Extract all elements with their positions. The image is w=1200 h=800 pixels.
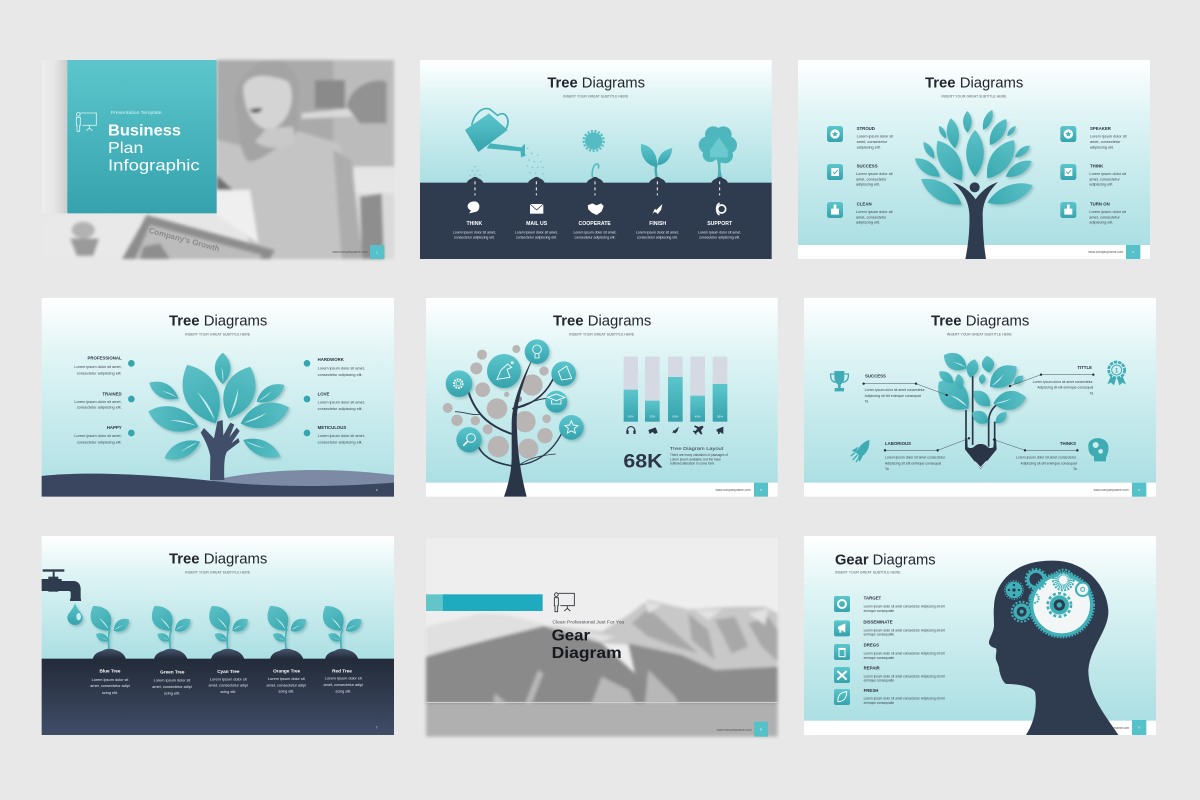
big stat: 68K xyxy=(623,452,663,473)
label: meticulous: consectetur adipiscing elit. xyxy=(318,440,363,444)
callout: laborious: Adipiscing sit elit enimque consequat xyxy=(885,461,941,465)
title: Gear Diagrams xyxy=(835,552,936,568)
list item: repair: Lorem Ipsum dolor sit amet consectetur. Adipiscing sit elit xyxy=(864,674,945,678)
text: success xyxy=(856,163,894,187)
list item: dregs: DREGS xyxy=(864,643,879,648)
hand-shaped trunk xyxy=(201,420,240,480)
section tagline: Clean Professional Just For You xyxy=(552,619,625,624)
step 2: mail us: MAIL US xyxy=(526,221,548,227)
title: Tree Diagrams xyxy=(931,314,1029,330)
label: hardwork: HARDWORK xyxy=(318,357,345,362)
label: trained: consectetur adipiscing elit. xyxy=(77,406,122,410)
icon: graduation cap xyxy=(548,394,565,404)
text: turn on: amet, consectetur xyxy=(1089,215,1120,219)
tree trunk and branches xyxy=(455,362,562,497)
connecting gear xyxy=(1029,594,1039,603)
slide background xyxy=(420,60,772,183)
photo tablet caption: Company's Growth xyxy=(148,226,221,253)
icon: star badge xyxy=(827,126,843,142)
step 4: finish: consectetur adipiscing elit. xyxy=(637,235,678,239)
slide 6: pencil tree xyxy=(804,298,1156,497)
slide background xyxy=(798,60,1150,245)
footer website and page number xyxy=(333,245,384,259)
text: turn on: TURN ON xyxy=(1090,201,1110,206)
section heading: Diagram xyxy=(552,645,622,662)
rolling hills xyxy=(42,470,394,497)
callout: success xyxy=(862,373,948,404)
text: green tree: amet, consectetur adipi xyxy=(152,685,192,689)
pencil tree leaves xyxy=(930,348,1028,428)
text: stroud: STROUD xyxy=(857,126,875,131)
sapling 1 xyxy=(85,601,132,649)
label: love: Lorem ipsum dolor sit amet, xyxy=(318,401,365,405)
text: red tree xyxy=(324,668,363,693)
text: orange tree: scing elit. xyxy=(278,690,294,694)
subtitle: INSERT YOUR GREAT SUBTITLE HERE xyxy=(947,332,1013,336)
text: think: adipiscing elit. xyxy=(1089,183,1113,187)
slide background xyxy=(804,298,1156,483)
footer website and page number xyxy=(717,722,768,737)
sapling 4 xyxy=(262,601,309,649)
footer website and page number: 1 xyxy=(376,250,378,254)
text: turn on: Lorem ipsum dolor sit xyxy=(1089,210,1127,214)
bar 2: 32% xyxy=(649,414,656,418)
step 1: think: consectetur adipiscing elit. xyxy=(454,235,495,239)
text: turn on: adipiscing elit. xyxy=(1089,221,1113,225)
tree leaves xyxy=(145,353,293,465)
list item: fresh: Lorem Ipsum dolor sit amet consectetur. Adipiscing sit elit xyxy=(864,697,945,701)
footer website and page number xyxy=(1094,483,1146,497)
upper ring gear xyxy=(1026,569,1046,590)
text: blue tree: scing elit. xyxy=(102,691,118,695)
text: stroud: adipiscing elit. xyxy=(857,145,881,149)
icon: headphones xyxy=(627,427,635,431)
text: blue tree: Lorem Ipsum dolor sit xyxy=(92,678,129,682)
bar chart xyxy=(624,357,727,422)
navy ground panel xyxy=(42,659,394,735)
step 3: cooperate xyxy=(573,203,617,239)
illustration: sun and sprout xyxy=(584,131,604,177)
label: happy: Lorem ipsum dolor sit amet, xyxy=(74,434,122,438)
text: cyan tree: Lorem Ipsum dolor sit xyxy=(210,677,248,681)
text: cyan tree xyxy=(209,669,248,694)
icon: award badge xyxy=(1107,362,1126,385)
white footer band xyxy=(804,483,1156,497)
icon: presenter xyxy=(554,593,574,612)
text: speaker: adipiscing elit. xyxy=(1090,145,1114,149)
subtitle: INSERT YOUR GREAT SUBTITLE HERE xyxy=(185,570,251,574)
text: clean: adipiscing elit. xyxy=(856,221,880,225)
footer website and page number xyxy=(1088,245,1140,259)
step 3: cooperate: COOPERATE xyxy=(579,221,611,227)
illustration: watering can xyxy=(465,109,544,176)
text: stroud: amet, consectetur xyxy=(857,140,888,144)
sapling 2 xyxy=(146,601,194,649)
top gear xyxy=(1053,570,1074,590)
stat description: suffered alteration in some form. xyxy=(670,462,715,466)
pencil stem xyxy=(965,370,998,469)
list item: target: Lorem Ipsum dolor sit amet consectetur. Adipiscing sit elit xyxy=(864,605,945,609)
text: think: THINK xyxy=(1090,163,1104,168)
label: professional: Lorem ipsum dolor sit amet, xyxy=(74,365,122,369)
text: red tree: Red Tree xyxy=(332,668,352,673)
footer website and page number: 6 xyxy=(1138,488,1140,492)
slide 4: hand tree xyxy=(42,298,394,497)
text: clean: Lorem ipsum dolor sit xyxy=(856,210,894,214)
right feature list xyxy=(1060,126,1128,225)
step 3: cooperate: consectetur adipiscing elit. xyxy=(575,235,615,239)
footer website and page number xyxy=(716,483,768,497)
callout: success: Lorem ipsum dolor sit amet consectetur. xyxy=(865,388,925,392)
text: speaker xyxy=(1090,126,1128,149)
text: green tree xyxy=(152,670,192,696)
page number: 4 xyxy=(376,488,378,492)
lower left gear xyxy=(1012,602,1032,622)
icon: light bulb xyxy=(533,345,541,358)
footer website and page number: www.companyname.com xyxy=(333,250,368,254)
text: stroud: Lorem ipsum dolor sit xyxy=(857,135,894,139)
step 5: support: SUPPORT xyxy=(707,221,733,227)
step 4: finish: Lorem ipsum dolor sit amet, xyxy=(636,230,679,234)
step 2: mail us: consectetur adipiscing elit. xyxy=(516,235,557,239)
title: Tree Diagrams xyxy=(169,314,267,330)
left feature list xyxy=(827,126,894,225)
list item: disseminate: DISSEMINATE xyxy=(863,620,893,625)
text: blue tree: amet, consectetur adipi xyxy=(90,684,130,688)
label: love xyxy=(304,392,365,411)
callout: thinks: THINKS xyxy=(1060,441,1076,446)
label: hardwork: Lorem ipsum dolor sit amet, xyxy=(318,366,365,370)
callout: success: Adipiscing sit elit enimque consequat xyxy=(865,394,921,398)
illustration: grown tree xyxy=(699,126,737,177)
soil mounds xyxy=(93,649,358,659)
text: speaker: SPEAKER xyxy=(1090,126,1112,131)
label: trained: TRAINED xyxy=(102,392,122,397)
panel heading: Business xyxy=(108,122,181,139)
footer website and page number: www.companyname.com xyxy=(1094,488,1129,492)
icon: rocket xyxy=(851,440,869,462)
icon: handshake xyxy=(588,203,604,215)
white footer band xyxy=(804,721,1156,735)
text: speaker: amet, consectetur xyxy=(1090,140,1121,144)
callout: success: SUCCESS xyxy=(865,373,886,378)
icon: clipboard xyxy=(827,164,843,180)
slide 9: gear diagrams head xyxy=(804,536,1156,735)
bar 3: 69% xyxy=(672,414,679,418)
text: turn on xyxy=(1089,201,1127,225)
callout: laborious: Lorem ipsum dolor sit amet consectetur. xyxy=(885,456,946,460)
slide background xyxy=(426,298,778,483)
footer website and page number: 5 xyxy=(760,488,762,492)
bar 1: 50% xyxy=(628,414,634,418)
label: love: consectetur adipiscing elit. xyxy=(318,407,363,411)
slide background xyxy=(42,298,394,497)
text: think: amet, consectetur xyxy=(1089,177,1120,181)
text: think: Lorem ipsum dolor sit xyxy=(1089,172,1127,176)
step 2: mail us xyxy=(515,204,558,239)
label: trained: Lorem ipsum dolor sit amet, xyxy=(74,400,122,404)
tree leaves xyxy=(912,108,1036,212)
icon: megaphone xyxy=(717,427,723,434)
icon: water drop xyxy=(67,603,83,625)
stat description xyxy=(670,446,728,466)
text: blue tree xyxy=(90,669,130,695)
callout: thinks: Ta xyxy=(1073,467,1077,471)
large toothed ring xyxy=(1029,573,1094,637)
right small gear xyxy=(1076,583,1089,596)
list item: fresh xyxy=(834,688,945,705)
icon: phone support xyxy=(717,203,726,215)
text: success: Lorem ipsum dolor sit xyxy=(856,172,894,176)
title: Tree Diagrams xyxy=(547,76,645,92)
text: red tree: scing elit. xyxy=(335,689,351,693)
illustration: seedling xyxy=(641,144,672,177)
step 1: think: THINK xyxy=(466,221,482,227)
slide 5: tree with bar chart xyxy=(426,298,778,497)
step 4: finish: FINISH xyxy=(649,221,666,227)
section heading: Gear xyxy=(552,628,590,645)
text: orange tree xyxy=(267,669,306,694)
text: cyan tree: Cyan Tree xyxy=(217,669,240,674)
icon: star outline xyxy=(565,421,578,433)
label: trained xyxy=(74,392,135,410)
list item: disseminate: enimque consequatte xyxy=(864,633,894,637)
teal title panel xyxy=(67,60,217,213)
callout: title: Lorem ipsum dolor sit amet consectetur. xyxy=(1033,380,1093,384)
icon: headphone cups xyxy=(626,430,636,434)
list item: target: TARGET xyxy=(864,596,881,601)
text: cyan tree: amet, consectetur adipi xyxy=(209,683,248,687)
callout: laborious: LABORIOUS xyxy=(885,441,911,446)
text: orange tree: Lorem Ipsum dolor sit xyxy=(268,677,306,681)
icon: gear xyxy=(454,379,463,388)
bar icons xyxy=(626,425,723,435)
gears inside head xyxy=(1005,569,1094,637)
step 4: finish xyxy=(636,204,679,239)
icon: cleaning brush xyxy=(1060,202,1076,218)
list item: target xyxy=(834,596,945,613)
slide 3: person tree xyxy=(798,60,1150,259)
list item: fresh: FRESH xyxy=(864,688,878,693)
text: stroud xyxy=(857,126,894,149)
list item: repair xyxy=(834,666,945,683)
soil mounds with dashed connectors xyxy=(467,177,728,195)
bar 5: 58% xyxy=(717,414,723,418)
step 1: think xyxy=(453,201,496,239)
slide 2: tree growth stages xyxy=(420,60,772,259)
step 3: cooperate: Lorem ipsum dolor sit amet, xyxy=(573,230,617,234)
icon: magnifier xyxy=(463,434,475,446)
text: clean: CLEAN xyxy=(857,201,872,206)
callout: title xyxy=(1009,365,1094,395)
icon: trophy xyxy=(831,371,848,391)
icon: megaphone xyxy=(558,366,572,380)
person-shaped trunk xyxy=(953,182,998,259)
text: orange tree: Orange Tree xyxy=(273,669,301,674)
text: green tree: Green Tree xyxy=(160,670,185,675)
subtitle: INSERT YOUR GREAT SUBTITLE HERE xyxy=(569,332,635,336)
list item: disseminate xyxy=(834,620,945,637)
label: love: LOVE xyxy=(318,392,330,397)
label: meticulous: METICULOUS xyxy=(318,425,346,430)
callout: laborious xyxy=(884,437,970,471)
icon: flask xyxy=(497,362,513,379)
label: hardwork xyxy=(304,357,365,377)
title: Tree Diagrams xyxy=(553,314,651,330)
navy ground panel xyxy=(420,183,772,259)
step 5: support: consectetur adipiscing elit. xyxy=(699,235,740,239)
text: success: amet, consectetur xyxy=(856,177,887,181)
subtitle: INSERT YOUR GREAT SUBTITLE HERE xyxy=(941,95,1007,99)
icon: envelope xyxy=(530,204,543,214)
list item: dregs: enimque consequatte xyxy=(864,656,894,660)
icon: presenter xyxy=(76,112,96,131)
text: blue tree: Blue Tree xyxy=(100,669,121,674)
footer website and page number: 9 xyxy=(1138,726,1140,730)
stat description: There are many variations of passages of xyxy=(670,453,728,457)
white footer band xyxy=(798,245,1150,259)
icon: faucet xyxy=(42,569,81,601)
sapling 3 xyxy=(203,601,251,649)
footer website and page number: 3 xyxy=(1132,250,1134,254)
grey foliage circles xyxy=(443,345,553,459)
label: happy: HAPPY xyxy=(107,425,122,430)
label: meticulous: Lorem ipsum dolor sit amet, xyxy=(318,434,365,438)
callout: title: TITTLE xyxy=(1077,365,1092,370)
slide 8: gear diagram section cover xyxy=(426,538,778,737)
label: professional: consectetur adipiscing elit. xyxy=(77,372,122,376)
text: red tree: amet, consectetur adipi xyxy=(324,683,363,687)
subtitle: INSERT YOUR GREAT SUBTITLE HERE xyxy=(835,571,901,575)
callout: laborious: Ta xyxy=(885,467,889,471)
list item: repair: REPAIR xyxy=(864,666,881,671)
slide 7: plants and tap xyxy=(42,536,394,735)
icon: rocket xyxy=(672,427,679,433)
title: Tree Diagrams xyxy=(925,76,1023,92)
list item: dregs xyxy=(834,643,945,660)
title: Tree Diagrams xyxy=(169,552,267,568)
icon: head with gears xyxy=(1088,438,1109,461)
footer website and page number: www.companyname.com xyxy=(717,728,752,732)
center gear xyxy=(1048,593,1071,617)
page number: 7 xyxy=(376,726,378,730)
section heading xyxy=(552,628,622,662)
text: red tree: Lorem Ipsum dolor sit xyxy=(325,677,363,681)
icon: cleaning brush xyxy=(827,202,843,218)
footer website and page number: 8 xyxy=(760,728,762,732)
slide background xyxy=(804,536,1156,721)
footer website and page number: www.companyname.com xyxy=(716,488,751,492)
slide 1: business plan cover xyxy=(42,60,394,259)
text: cyan tree: scing elit. xyxy=(220,690,236,694)
footer website and page number: www.companyname.com xyxy=(1094,726,1130,730)
text: speaker: Lorem ipsum dolor sit xyxy=(1090,135,1128,139)
text: success: SUCCESS xyxy=(857,163,878,168)
panel heading: Infographic xyxy=(108,158,200,175)
step 1: think: Lorem ipsum dolor sit amet, xyxy=(453,230,496,234)
step 2: mail us: Lorem ipsum dolor sit amet, xyxy=(515,230,558,234)
callout: thinks: Adipiscing sit elit enimque consequat xyxy=(1021,461,1077,465)
step 5: support xyxy=(698,203,741,239)
panel heading: Plan xyxy=(108,140,143,157)
photo: mountain landscape xyxy=(426,538,778,737)
text: orange tree: amet, consectetur adipi xyxy=(267,683,306,687)
text: clean: amet, consectetur xyxy=(856,215,887,219)
list item: dregs: Lorem Ipsum dolor sit amet consectetur. Adipiscing sit elit xyxy=(864,652,945,656)
callout: thinks xyxy=(993,438,1078,471)
footer website and page number xyxy=(1094,720,1146,735)
panel subtitle: Presentation Template xyxy=(111,110,162,115)
text: green tree: Lorem Ipsum dolor sit xyxy=(154,679,191,683)
list item: target: enimque consequatte xyxy=(864,609,894,613)
label: happy xyxy=(74,425,135,444)
text: clean xyxy=(856,201,894,225)
label: meticulous xyxy=(304,425,365,444)
right labels xyxy=(304,357,365,444)
teal accent bar xyxy=(426,594,543,611)
list item: repair: enimque consequatte xyxy=(864,679,894,683)
subtitle: INSERT YOUR GREAT SUBTITLE HERE xyxy=(563,95,629,99)
list item: disseminate: Lorem Ipsum dolor sit amet consectetur. Adipiscing sit elit xyxy=(864,628,945,632)
label: hardwork: consectetur adipiscing elit. xyxy=(318,373,363,377)
callout: success: Ta xyxy=(865,400,868,404)
icon: speech bubble xyxy=(468,201,479,213)
teal icon circles xyxy=(446,339,584,452)
list item: fresh: enimque consequatte xyxy=(864,701,894,705)
text: think xyxy=(1089,163,1127,187)
white footer band xyxy=(426,483,778,497)
slide background xyxy=(42,536,394,659)
subtitle: INSERT YOUR GREAT SUBTITLE HERE xyxy=(185,332,251,336)
text: green tree: scing elit. xyxy=(164,692,180,696)
left labels xyxy=(74,356,135,444)
icon: award badge: 1 xyxy=(1115,367,1119,374)
callout: thinks: Lorem ipsum dolor sit amet consectetur. xyxy=(1016,456,1077,460)
small solid gear xyxy=(1005,581,1023,599)
icon: airplane xyxy=(693,425,704,435)
sapling 5 xyxy=(317,601,365,649)
head silhouette xyxy=(989,561,1118,735)
step 5: support: Lorem ipsum dolor sit amet, xyxy=(698,230,741,234)
panel heading xyxy=(108,122,200,175)
icon: star badge xyxy=(1060,126,1076,142)
footer website and page number: www.companyname.com xyxy=(1088,250,1124,254)
icon: clipboard xyxy=(1060,164,1076,180)
callout: title: Ta xyxy=(1090,391,1093,395)
stat description: Lorem Ipsum available, but the have xyxy=(670,457,721,461)
stat description: Tree Diagram Layout xyxy=(670,446,724,452)
label: happy: consectetur adipiscing elit. xyxy=(77,440,122,444)
icon: rocket xyxy=(652,204,662,214)
callout: title: Adipiscing sit elit enimque consequat xyxy=(1037,386,1093,390)
bar 4: 40% xyxy=(695,414,701,418)
label: professional xyxy=(74,356,135,376)
icon: game controller xyxy=(648,427,658,434)
label: professional: PROFESSIONAL xyxy=(88,356,122,361)
photo: woman laughing at desk xyxy=(42,60,394,259)
text: success: adipiscing elit. xyxy=(856,183,880,187)
